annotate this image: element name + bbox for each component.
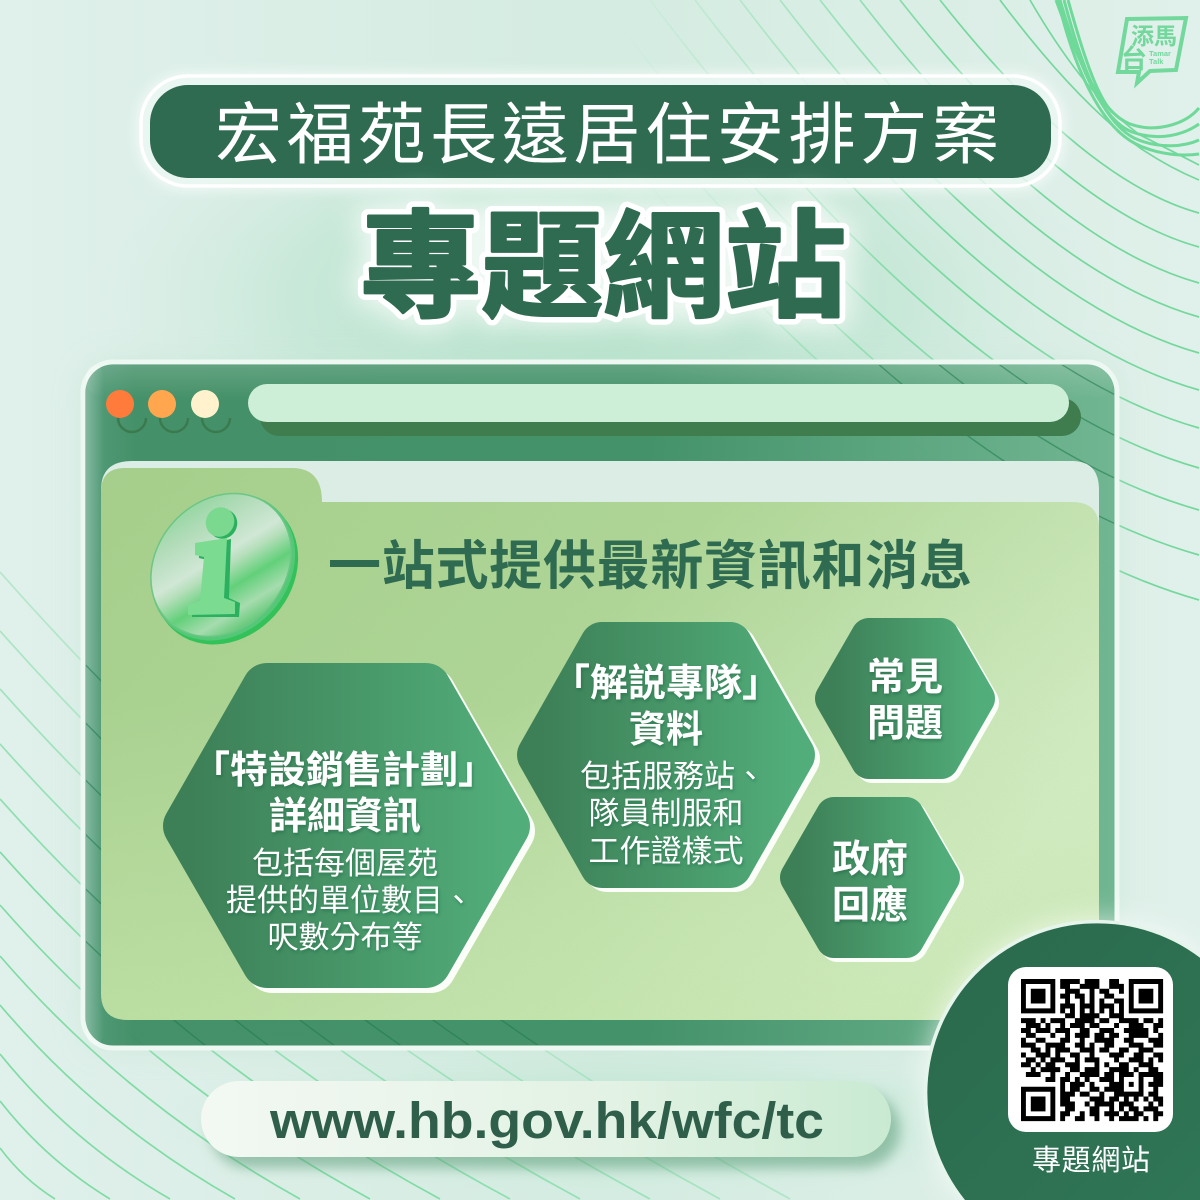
icon: information coin — [121, 464, 328, 674]
QR caption: 專題網站 — [1032, 1144, 1150, 1177]
hexagon: explanation team information: 包括服務站、 — [580, 759, 766, 794]
logo line bundle — [1056, 0, 1199, 155]
logo: Tamar Talk speech bubble — [1118, 18, 1186, 83]
logo: Tamar Talk speech bubble: 添馬 — [1131, 23, 1177, 49]
hexagon: special sales scheme details — [188, 688, 510, 968]
window control dots — [106, 390, 230, 432]
hexagon: government response: 政府 — [832, 839, 908, 881]
QR code badge — [924, 920, 1200, 1200]
website address pill: www.hb.gov.hk/wfc/tc — [269, 1092, 824, 1149]
content panel — [101, 468, 1099, 1020]
lines showing through the window frame — [86, 365, 1114, 1045]
background lines: upper right fan — [500, 0, 1199, 600]
hexagon: special sales scheme details: 包括每個屋苑 — [252, 846, 438, 881]
heading: 專題網站: 專題網站 — [360, 202, 846, 332]
hexagon: special sales scheme details: 提供的單位數目、 — [226, 883, 474, 918]
hexagon: frequently asked questions: 問題 — [867, 703, 943, 745]
address bar — [248, 384, 1081, 436]
title banner: 宏福苑長遠居住安排方案 — [215, 98, 999, 173]
logo: Tamar Talk speech bubble: Talk — [1149, 57, 1164, 66]
hexagon: explanation team information — [539, 644, 798, 870]
hexagon: explanation team information: 資料 — [629, 709, 703, 750]
background lines: lower left fan — [0, 572, 790, 1199]
hexagon: special sales scheme details: 詳細資訊 — [269, 796, 421, 838]
logo: Tamar Talk speech bubble: Tamar — [1149, 49, 1171, 58]
window frame — [82, 361, 1118, 1049]
logo: Tamar Talk speech bubble: 台 — [1121, 44, 1147, 74]
QR code card — [1008, 967, 1173, 1132]
browser window — [74, 351, 1128, 1058]
hexagon: frequently asked questions — [833, 636, 981, 765]
hexagon: explanation team information: 工作證樣式 — [588, 834, 744, 869]
hexagon: explanation team information: 隊員制服和 — [588, 796, 744, 831]
back page of folder — [101, 461, 1099, 700]
title banner — [140, 76, 1061, 187]
hexagon: special sales scheme details: 呎數分布等 — [268, 920, 422, 955]
hexagon: government response: 回應 — [832, 885, 908, 927]
heading: 專題網站: 專題網站 — [360, 202, 846, 332]
hexagon: government response — [798, 815, 946, 944]
QR code — [1021, 981, 1163, 1119]
website address pill — [201, 1081, 900, 1168]
subheading: 一站式提供最新資訊和消息 — [328, 537, 972, 596]
hexagon: special sales scheme details: 「特設銷售計劃」 — [192, 750, 496, 792]
heading: 專題網站: 專題網站 — [360, 202, 846, 332]
hexagon: explanation team information: 「解説專隊」 — [552, 663, 780, 705]
hexagon: frequently asked questions: 常見 — [867, 657, 943, 699]
